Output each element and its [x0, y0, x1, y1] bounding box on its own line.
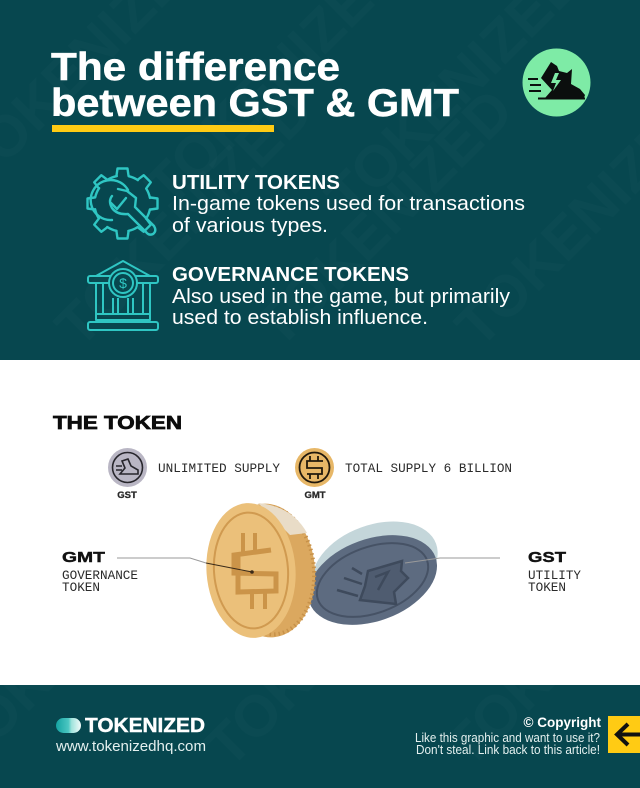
copyright note: Like this graphic and want to use it? — [415, 731, 600, 745]
label: GMT governance token: GMT — [62, 550, 105, 566]
copyright note: © Copyright — [524, 715, 601, 730]
title: between GST & GMT — [51, 82, 459, 125]
footer url: www.tokenizedhq.com — [55, 739, 206, 755]
title underline — [52, 125, 274, 132]
text block: utility tokens: of various types. — [172, 215, 328, 237]
copyright note — [415, 715, 601, 757]
illustration: GMT coin — [202, 500, 321, 641]
text block: utility tokens: UTILITY TOKENS — [172, 172, 340, 194]
label: GMT governance token: GOVERNANCE — [62, 569, 138, 583]
text block: governance tokens: GOVERNANCE TOKENS — [172, 264, 409, 286]
icon: gear and wrench — [88, 168, 158, 238]
leader line: GMT — [117, 558, 254, 574]
icon: bank building with dollar: $ — [119, 275, 127, 291]
logo: Tokenized: TOKENIZED — [85, 715, 205, 737]
text block: utility tokens — [172, 172, 525, 237]
icon: bank building with dollar — [88, 261, 158, 330]
label: GMT governance token — [62, 550, 138, 595]
icon: running shoe badge — [522, 48, 590, 116]
title: The difference — [51, 46, 340, 89]
label: GST utility token: GST — [528, 550, 566, 566]
icon: GST badge: GST — [117, 490, 137, 501]
text block: governance tokens: Also used in the game, but primarily — [172, 286, 510, 308]
illustration: GST coin — [296, 505, 450, 641]
panel: header background — [0, 0, 640, 360]
text block: governance tokens: used to establish influence. — [172, 307, 428, 329]
icon: GMT badge: GMT — [304, 490, 326, 501]
text block: utility tokens: In-game tokens used for transactions — [172, 193, 525, 215]
legend: total supply: TOTAL SUPPLY 6 BILLION — [345, 462, 512, 476]
icon: GMT badge — [295, 448, 334, 501]
label: GST utility token: TOKEN — [528, 581, 566, 595]
copyright note: Don't steal. Link back to this article! — [416, 743, 600, 757]
text block: governance tokens — [172, 264, 510, 329]
label: GMT governance token: TOKEN — [62, 581, 100, 595]
panel: footer background — [0, 685, 640, 788]
legend: unlimited supply: UNLIMITED SUPPLY — [158, 462, 280, 476]
leader line: GST — [405, 558, 500, 563]
label: GST utility token: UTILITY — [528, 569, 581, 583]
icon: GST badge — [108, 448, 147, 501]
icon: yellow arrow tab — [608, 716, 640, 753]
label: GST utility token — [528, 550, 581, 595]
heading: the token: THE TOKEN — [53, 413, 182, 433]
title — [51, 46, 459, 125]
